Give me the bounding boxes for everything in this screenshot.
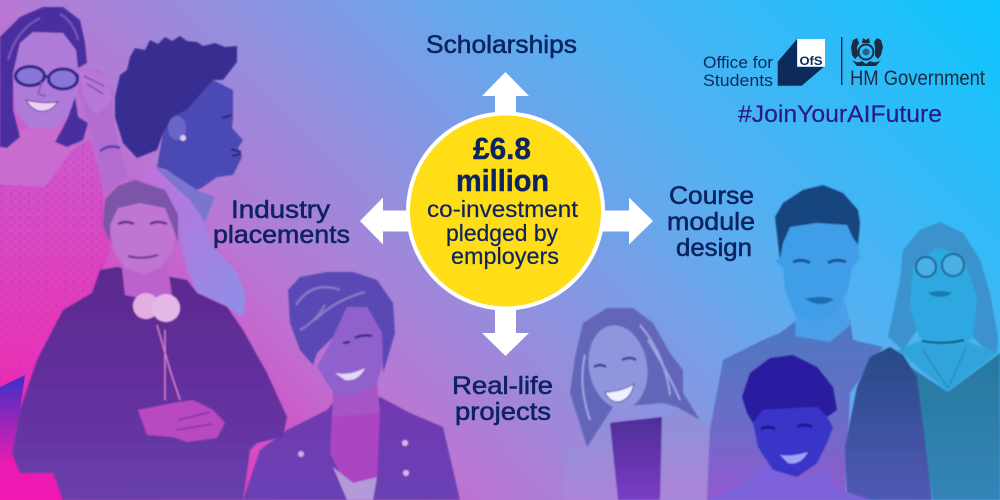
label: Course module design: module — [667, 208, 755, 236]
photo: chair behind student — [0, 375, 65, 500]
label: Scholarships: Scholarships — [426, 31, 577, 59]
label: Industry placements: Industry — [231, 196, 331, 224]
logo: Office for Students: OfS — [800, 56, 823, 68]
icon: royal crest — [851, 38, 883, 66]
label: Course module design: Course — [669, 182, 754, 210]
photo: young man smiling in front — [707, 355, 870, 500]
logo: Office for Students: Students — [703, 71, 773, 90]
arrow: down to Real-life projects — [482, 300, 529, 356]
photo: woman with glasses — [0, 7, 128, 385]
logo: HM Government: HM Government — [850, 67, 985, 90]
photo: young man in hoodie with headphones — [12, 180, 287, 500]
central yellow circle with figure — [406, 112, 605, 310]
photo: person with short dark hair — [707, 185, 883, 500]
arrow: left to Industry placements — [360, 198, 420, 244]
description text: co-investment — [427, 196, 579, 222]
headline unit: million — [456, 163, 549, 198]
description text: pledged by — [446, 220, 558, 246]
description text — [427, 196, 579, 269]
headline figure: £6.8 — [473, 131, 531, 166]
arrow: up to Scholarships — [482, 72, 529, 125]
hashtag: #JoinYourAIFuture — [738, 101, 942, 128]
label: Industry placements — [213, 196, 350, 249]
label: Industry placements: placements — [213, 221, 350, 249]
logo: Office for Students — [703, 39, 825, 90]
label: Course module design: design — [676, 234, 752, 262]
photo: woman with short hair in leather jacket — [243, 272, 460, 500]
label: Course module design — [667, 182, 755, 262]
photo: woman with round glasses and dark top — [845, 222, 1000, 500]
label: Real-life projects — [452, 372, 553, 426]
logo divider — [841, 37, 842, 85]
label: Real-life projects: Real-life — [452, 372, 553, 400]
photo: smiling woman with wavy hair — [563, 308, 742, 500]
logo: Office for Students: Office for — [703, 53, 773, 72]
arrow: right to Course module design — [590, 198, 653, 244]
label: Real-life projects: projects — [455, 398, 551, 426]
photo: person with mohawk in profile — [115, 36, 246, 317]
description text: employers — [451, 243, 559, 269]
